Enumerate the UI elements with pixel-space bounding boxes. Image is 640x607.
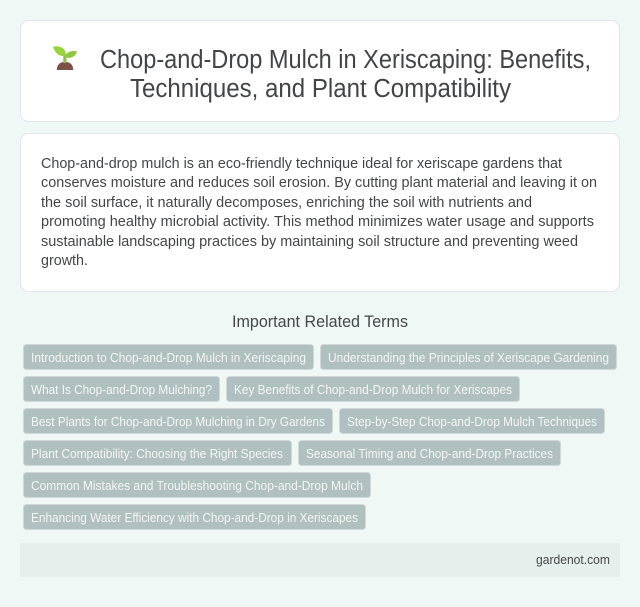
tag: Plant Compatibility: Choosing the Right Species	[31, 446, 283, 461]
tag: Enhancing Water Efficiency with Chop-and-Drop in Xeriscapes	[31, 510, 358, 525]
footer bar	[20, 543, 620, 577]
tag: Seasonal Timing and Chop-and-Drop Practices	[306, 446, 553, 461]
panel: description card	[20, 134, 620, 292]
tag: Introduction to Chop-and-Drop Mulch in Xeriscaping	[31, 350, 306, 365]
tag	[24, 440, 292, 466]
tag: Best Plants for Chop-and-Drop Mulching in Dry Gardens	[31, 414, 325, 429]
icon: sprout	[53, 46, 77, 70]
text block: description: sustainable landscaping practices by maintaining soil structure and preventing weed	[41, 233, 578, 250]
tag: Understanding the Principles of Xeriscape Gardening	[328, 350, 609, 365]
panel: title card	[20, 20, 620, 122]
tag	[320, 344, 616, 370]
title: Techniques, and Plant Compatibility	[130, 75, 511, 103]
tag: What Is Chop-and-Drop Mulching?	[31, 382, 212, 397]
tag	[298, 440, 560, 466]
tag list	[24, 344, 616, 530]
tag	[340, 408, 604, 434]
title	[100, 46, 591, 103]
text block: description	[41, 155, 597, 269]
tag: Common Mistakes and Troubleshooting Chop-and-Drop Mulch	[31, 478, 363, 493]
heading: important related terms: Important Related Terms	[232, 313, 408, 331]
text block: description: promoting healthy microbial activity. This method minimizes water usage and supports	[41, 213, 594, 230]
tag	[24, 344, 314, 370]
text block: description: growth.	[41, 252, 88, 269]
text block: description: the soil surface, it naturally decomposes, enriching the soil with nutrients and	[41, 194, 532, 211]
tag	[24, 472, 370, 498]
title: Chop-and-Drop Mulch in Xeriscaping: Benefits,	[100, 46, 591, 74]
tag	[24, 376, 220, 402]
footer credit: gardenot.com	[536, 552, 610, 567]
tag: Step-by-Step Chop-and-Drop Mulch Techniques	[347, 414, 597, 429]
tag: Key Benefits of Chop-and-Drop Mulch for Xeriscapes	[234, 382, 512, 397]
tag	[226, 376, 520, 402]
text block: description: conserves moisture and reduces soil erosion. By cutting plant material and leaving it on	[41, 174, 597, 191]
tag	[24, 504, 366, 530]
text block: description: Chop-and-drop mulch is an eco-friendly technique ideal for xeriscape gardens that	[41, 155, 563, 172]
tag	[24, 408, 332, 434]
